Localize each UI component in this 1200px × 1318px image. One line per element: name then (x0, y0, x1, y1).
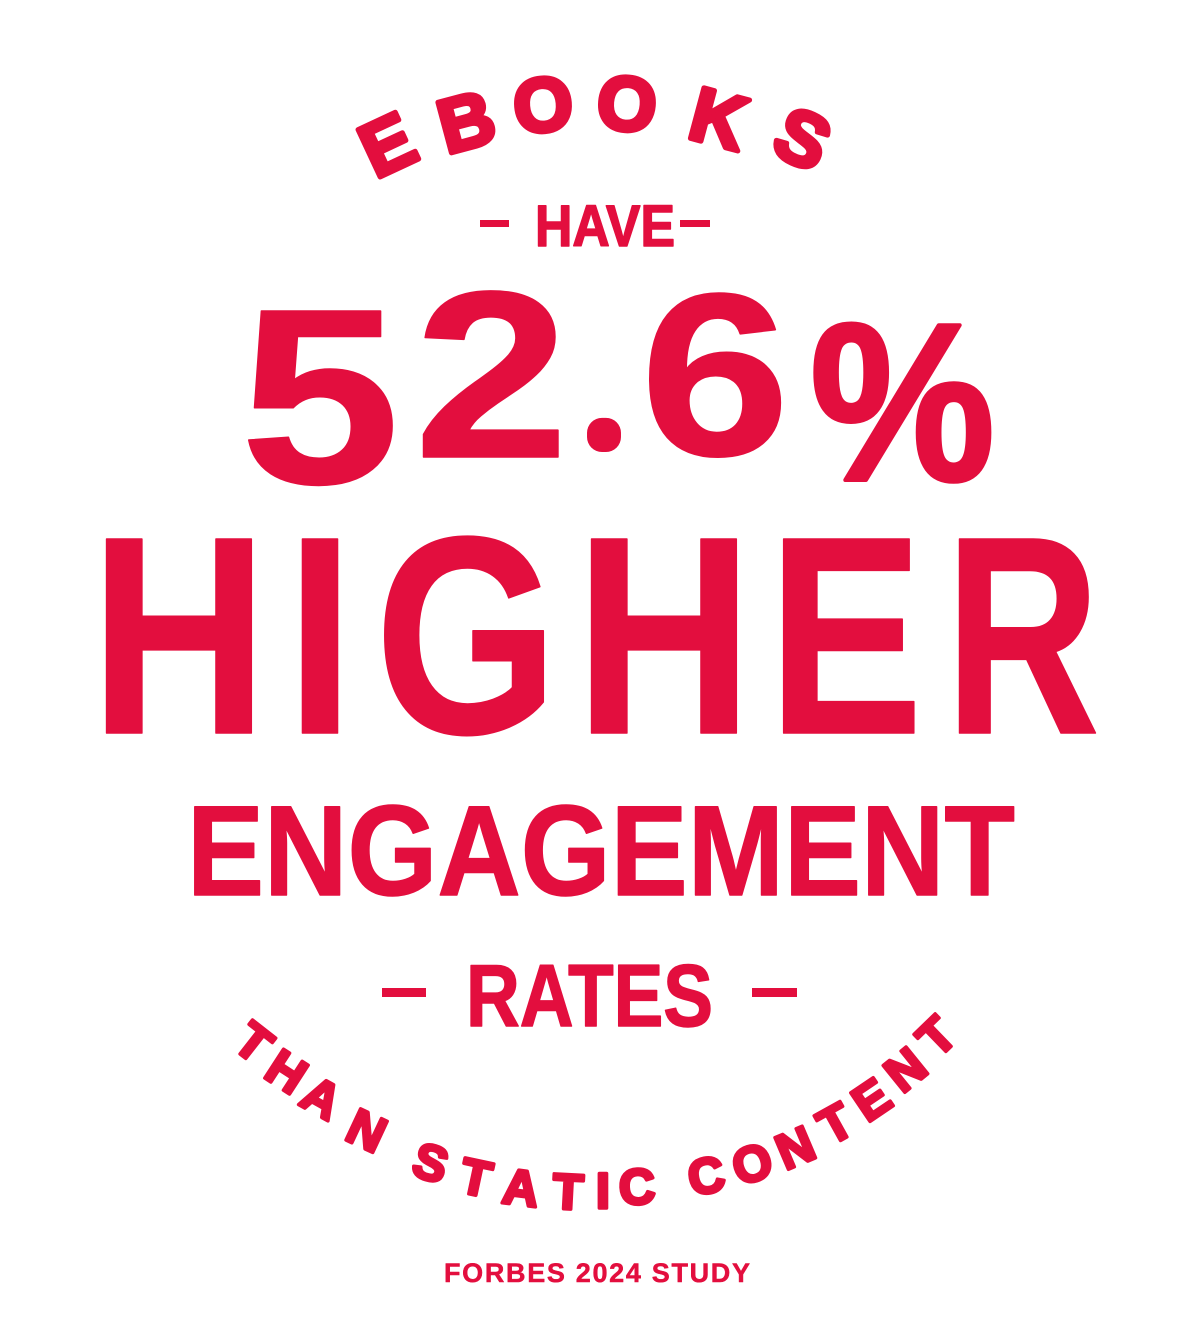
arched text: THAN STATIC CONTENT: I (596, 1163, 610, 1219)
heading: HIGHER (90, 478, 1100, 793)
line: HAVE with dashes: HAVE (535, 194, 675, 259)
arched heading: EBOOKS: O (594, 60, 660, 149)
arched text: THAN STATIC CONTENT: T (455, 1147, 497, 1209)
arched heading: EBOOKS: O (510, 61, 576, 150)
arched text: THAN STATIC CONTENT (224, 1006, 967, 1221)
arched text: THAN STATIC CONTENT: N (874, 1037, 937, 1103)
source: FORBES 2024 STUDY: FORBES 2024 STUDY (444, 1258, 750, 1288)
arched text: THAN STATIC CONTENT: T (906, 1006, 967, 1067)
arched text: THAN STATIC CONTENT: N (768, 1115, 823, 1181)
statistic: 52.6%: 5 (240, 257, 400, 536)
arched text: THAN STATIC CONTENT: A (500, 1158, 542, 1218)
heading: HIGHER: E (768, 478, 923, 793)
arched text: THAN STATIC CONTENT: C (683, 1145, 729, 1207)
arched text: THAN STATIC CONTENT: H (256, 1039, 317, 1105)
statistic: 52.6%: % (810, 276, 995, 528)
arched heading: EBOOKS: S (761, 90, 843, 189)
arched heading: EBOOKS (347, 60, 843, 195)
arched text: THAN STATIC CONTENT: N (338, 1098, 395, 1164)
statistic: 52.6% (240, 243, 995, 536)
heading: HIGHER: I (286, 478, 354, 793)
heading: HIGHER: G (375, 478, 558, 793)
statistic: 52.6%: 2 (414, 243, 569, 508)
heading: ENGAGEMENT: ENGAGEMENT (187, 780, 1015, 923)
arched text: THAN STATIC CONTENT: O (726, 1131, 779, 1196)
arched heading: EBOOKS: K (681, 71, 756, 168)
arched heading: EBOOKS: E (347, 96, 429, 195)
arched text: THAN STATIC CONTENT: T (551, 1163, 585, 1221)
arched text: THAN STATIC CONTENT: S (407, 1131, 455, 1195)
line: HAVE with dashes (480, 194, 710, 259)
statistic: 52.6%: 6 (640, 246, 790, 505)
arched text: THAN STATIC CONTENT: E (842, 1067, 901, 1132)
heading: HIGHER: H (90, 478, 268, 793)
arched text: THAN STATIC CONTENT: T (224, 1011, 283, 1074)
statistic: 52.6%: . (600, 412, 608, 443)
heading: HIGHER: H (575, 478, 753, 793)
heading: HIGHER: R (945, 478, 1100, 793)
arched text: THAN STATIC CONTENT: A (292, 1065, 351, 1131)
line: RATES with dashes: RATES (466, 946, 713, 1045)
arched heading: EBOOKS: B (429, 74, 504, 171)
arched text: THAN STATIC CONTENT: T (809, 1092, 862, 1156)
arched text: THAN STATIC CONTENT: C (618, 1158, 657, 1216)
